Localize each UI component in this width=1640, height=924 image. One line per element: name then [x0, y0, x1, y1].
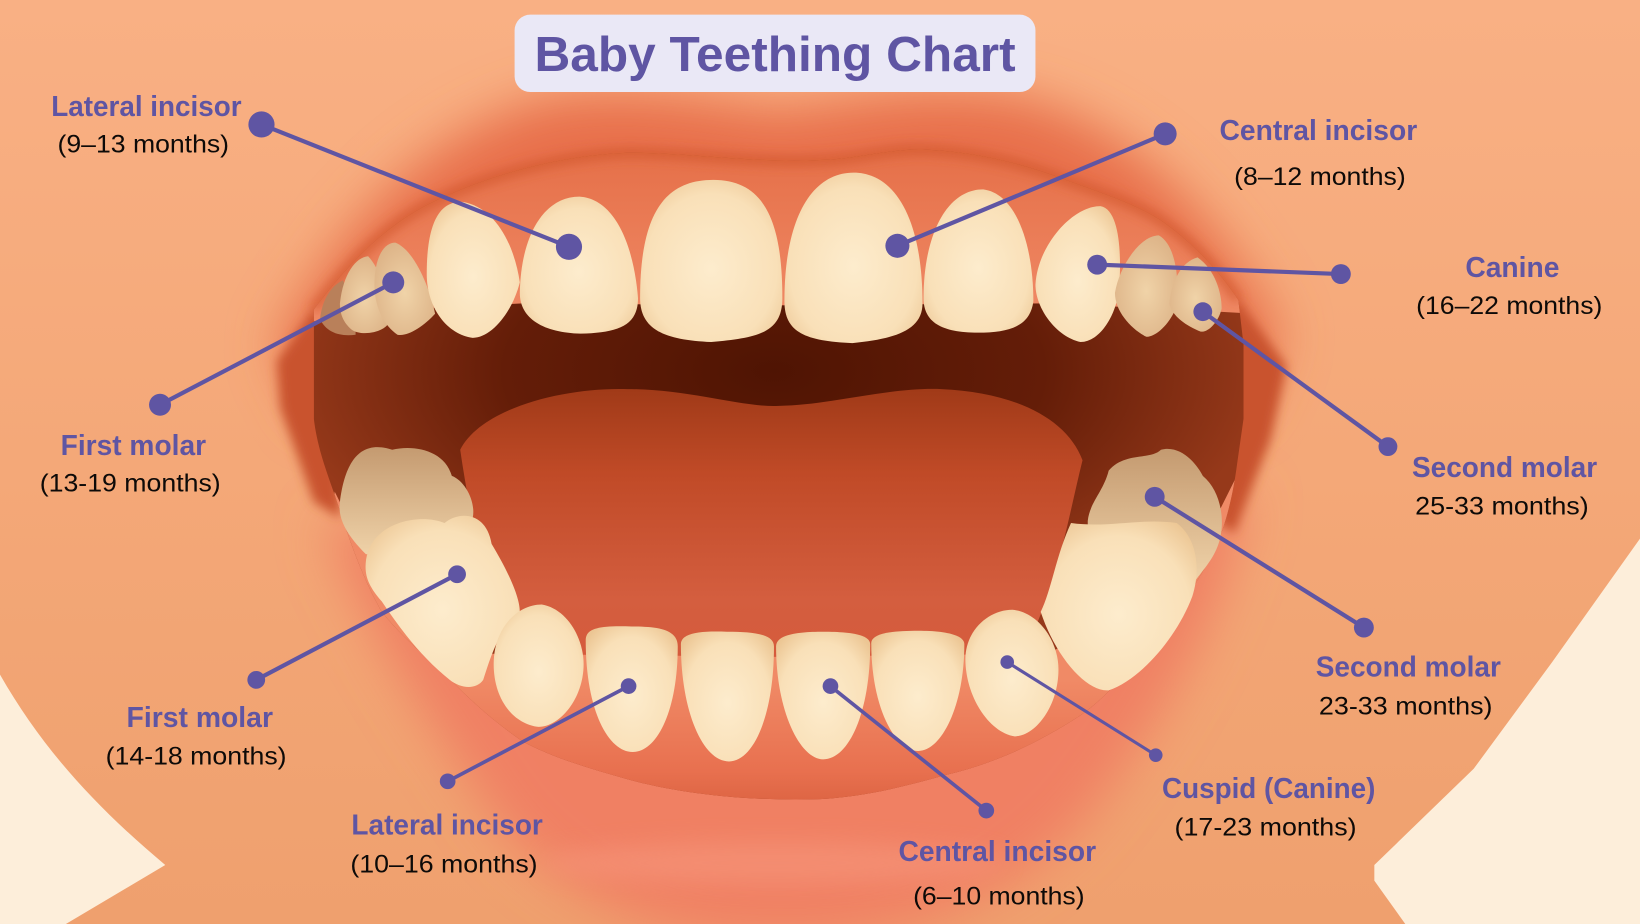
- callout line: lower second molar: [1145, 487, 1374, 638]
- callout line: upper central incisor: [885, 122, 1177, 258]
- title: [515, 15, 1035, 92]
- label: lower cuspid: (17-23 months): [1175, 814, 1357, 842]
- label: lower second molar: [1316, 651, 1501, 720]
- label: upper first molar: (13-19 months): [40, 470, 221, 498]
- label: upper lateral incisor: (9–13 months): [58, 131, 229, 159]
- lips: upper lip: [277, 92, 1281, 418]
- lips: lower lip highlight: [544, 842, 1004, 884]
- lower gum: [334, 480, 1235, 800]
- label: upper canine: [1416, 251, 1602, 320]
- label: lower first molar: First molar: [127, 701, 273, 733]
- label: upper canine: Canine: [1465, 251, 1559, 283]
- label: lower central incisor: [898, 835, 1096, 911]
- label: lower central incisor: (6–10 months): [913, 883, 1085, 911]
- label: lower second molar: 23-33 months): [1319, 692, 1493, 720]
- callout line: upper second molar: [1193, 302, 1397, 456]
- mouth corner folds: [277, 300, 1286, 533]
- callout line: upper lateral incisor: [248, 111, 582, 260]
- label: upper second molar: Second molar: [1412, 451, 1597, 483]
- label: upper central incisor: (8–12 months): [1234, 163, 1406, 191]
- label: lower central incisor: Central incisor: [898, 835, 1096, 867]
- label: lower first molar: [106, 701, 287, 771]
- mouth interior: [314, 150, 1244, 800]
- callout line: upper first molar: [149, 271, 404, 416]
- callout line: lower lateral incisor: [440, 678, 636, 789]
- label: lower cuspid: [1162, 772, 1375, 842]
- label: lower lateral incisor: [350, 809, 543, 878]
- callout line: lower cuspid: [1000, 655, 1163, 762]
- label: lower cuspid: Cuspid (Canine): [1162, 772, 1375, 804]
- label: upper second molar: [1412, 451, 1597, 521]
- mouth upper edge shade: [314, 150, 1238, 310]
- label: upper lateral incisor: [51, 90, 242, 159]
- lower teeth: [340, 447, 1222, 761]
- callout line: upper canine: [1087, 255, 1351, 284]
- callout line: lower central incisor: [823, 678, 994, 818]
- label: lower lateral incisor: (10–16 months): [350, 850, 538, 878]
- label: lower first molar: (14-18 months): [106, 743, 287, 771]
- lips: lower lip: [324, 492, 1250, 924]
- label: lower second molar: Second molar: [1316, 651, 1501, 683]
- upper gum: [293, 146, 1255, 324]
- label: upper central incisor: [1220, 114, 1417, 191]
- callout line: lower first molar: [247, 565, 466, 689]
- label: upper first molar: First molar: [61, 429, 206, 461]
- label: upper lateral incisor: Lateral incisor: [51, 90, 242, 122]
- label: upper canine: (16–22 months): [1416, 292, 1602, 320]
- label: lower lateral incisor: Lateral incisor: [351, 809, 543, 841]
- title: Baby Teething Chart: [534, 28, 1016, 82]
- label: upper first molar: [40, 429, 221, 498]
- upper teeth: [320, 173, 1222, 343]
- label: upper second molar: 25-33 months): [1415, 493, 1589, 521]
- label: upper central incisor: Central incisor: [1220, 114, 1417, 146]
- tongue: [460, 388, 1082, 657]
- mouth: [314, 150, 1244, 800]
